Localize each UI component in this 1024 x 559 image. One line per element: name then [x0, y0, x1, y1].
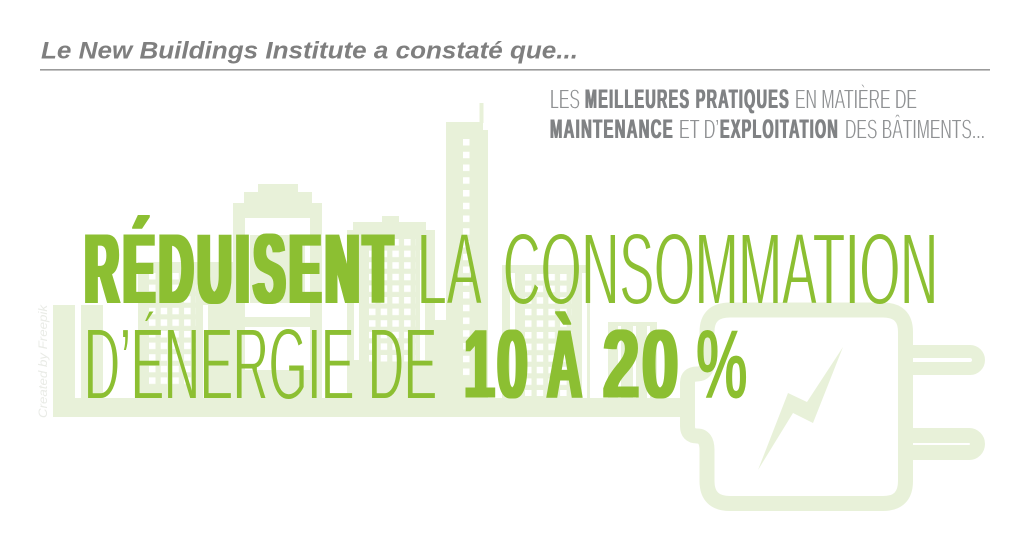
icon: electric plug [688, 310, 978, 504]
intro line 1: EN MATIÈRE DE [795, 84, 917, 114]
intro line 2 [550, 114, 985, 144]
header rule [40, 69, 990, 71]
low building second [81, 305, 103, 398]
background city skyline [53, 103, 693, 417]
highlighted figures: % [696, 310, 750, 418]
plug prong top [905, 352, 978, 368]
right windowed building [502, 265, 590, 398]
tall tower with antenna [446, 103, 488, 398]
intro line 1: LES [550, 84, 580, 114]
lower block beside tower [435, 320, 447, 398]
highlighted figures [464, 310, 750, 418]
intro line 2: MAINTENANCE [550, 114, 674, 144]
central windowed building [347, 216, 435, 398]
intro line 2: ET D’ [679, 114, 719, 144]
domed building [233, 184, 322, 398]
main headline [84, 212, 938, 422]
header sentence: Le New Buildings Institute a constaté que... [41, 38, 578, 64]
connecting block [213, 262, 233, 398]
headline line 2: D’ÉNERGIE DE [84, 306, 437, 422]
intro line 1: MEILLEURES PRATIQUES [585, 84, 790, 114]
credit: Created by Freepik: Created by Freepik [38, 304, 50, 418]
low building left [53, 305, 75, 398]
headline line 1: LA [417, 212, 482, 326]
headline line 1: RÉDUISENT [85, 213, 397, 324]
plug prong bottom [905, 436, 978, 452]
ground strip [53, 398, 693, 417]
icon: lightning bolt [758, 347, 843, 470]
highlighted figures: 10 [464, 310, 530, 418]
plug body [688, 310, 906, 504]
highlighted figures: À [547, 310, 584, 418]
highlighted figures: 20 [603, 310, 681, 418]
small far right building [608, 322, 657, 398]
intro line 2: EXPLOITATION [720, 114, 839, 144]
windowed building left [138, 262, 213, 398]
intro text [550, 84, 985, 144]
